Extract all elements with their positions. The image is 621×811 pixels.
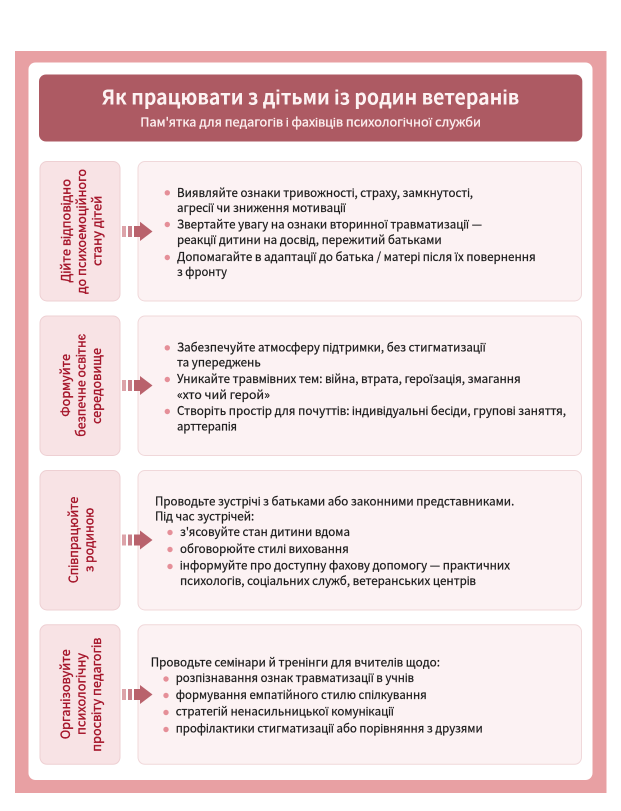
arrow 4 (122, 685, 152, 704)
panel: text box 1: Звертайте увагу на ознаки вторинної травматизації — (177, 216, 482, 232)
header banner (39, 74, 582, 142)
panel: heading box 2: безпечне освітнє (70, 334, 90, 437)
panel: heading box 1 (40, 162, 120, 301)
panel: text box 1: реакції дитини на досвід, пережитий батьками (177, 231, 442, 248)
panel: text box 3: інформуйте про доступну фахову допомогу — практичних (180, 556, 510, 574)
panel: heading box 2 (40, 316, 120, 456)
subtitle: Пам'ятка для педагогів і фахівців психологічної служби (140, 112, 481, 130)
panel: heading box 1: Дійте відповідно (56, 179, 74, 283)
panel: text box 2: арттерапія (177, 418, 237, 434)
panel: text box 4: стратегій ненасильницької комунікації (176, 702, 395, 720)
panel: heading box 4 (40, 625, 120, 764)
panel: heading box 3 (40, 470, 120, 610)
panel: text box 3: Проводьте зустрічі з батьками або законними представниками. (155, 492, 514, 510)
panel: text box 2: Забезпечуйте атмосферу підтримки, без стигматизації (177, 338, 486, 356)
panel: text box 2: Створіть простір для почуттів: індивідуальні бесіди, групові заняття, (177, 402, 566, 419)
arrow 3 (122, 530, 152, 550)
panel: heading box 1: стану дітей (86, 196, 106, 266)
panel: text box 1: агресії чи зниження мотивації (177, 199, 347, 216)
panel: text box 4: Проводьте семінари й тренінги для вчителів щодо: (151, 654, 440, 670)
panel: text box 1: Допомагайте в адаптації до батька / матері після їх повернення (177, 248, 536, 265)
row 3 (40, 470, 582, 610)
arrow 1 (122, 222, 152, 241)
panel: text box 1: Виявляйте ознаки тривожності, страху, замкнутості, (177, 184, 473, 201)
row 2 (40, 316, 582, 456)
panel: text box 3: Під час зустрічей: (155, 508, 254, 524)
arrow 2 (122, 376, 152, 395)
row 1 (40, 162, 582, 301)
panel: text box 3: психологів, соціальних служб, ветеранських центрів (180, 572, 476, 589)
panel: heading box 3: з родиною (78, 507, 98, 572)
panel: text box 2 (138, 316, 582, 456)
panel: heading box 2: Формуйте (55, 354, 74, 417)
panel: text box 2: та упереджень (177, 354, 261, 370)
panel: text box 2: Уникайте травмівних тем: війна, втрата, героїзація, змагання (177, 370, 521, 387)
panel: heading box 4: Організовуйте (55, 649, 74, 739)
panel: heading box 4: просвіту педагогів (86, 638, 105, 752)
panel: text box 3: з'ясовуйте стан дитини вдома (180, 523, 350, 540)
panel: text box 1 (138, 162, 582, 301)
panel: text box 4: розпізнавання ознак травматизації в учнів (176, 669, 414, 686)
title: Як працювати з дітьми із родин ветеранів (102, 80, 519, 110)
panel: heading box 3: Співпрацюйте (63, 497, 82, 583)
panel: text box 2: «хто чий герой» (177, 386, 270, 403)
panel: text box 3 (138, 470, 582, 610)
panel: text box 3: обговорюйте стилі виховання (180, 540, 349, 557)
panel: text box 4 (138, 625, 582, 764)
panel: heading box 4: психологічну (70, 653, 90, 735)
panel: text box 1: з фронту (177, 263, 227, 280)
panel: heading box 1: до психоемоційного (71, 169, 90, 294)
panel: heading box 2: середовище (86, 348, 105, 424)
panel: text box 4: формування емпатійного стилю спілкування (176, 686, 427, 703)
panel: text box 4: профілактики стигматизації або порівняння з друзями (176, 720, 483, 736)
row 4 (40, 625, 582, 764)
